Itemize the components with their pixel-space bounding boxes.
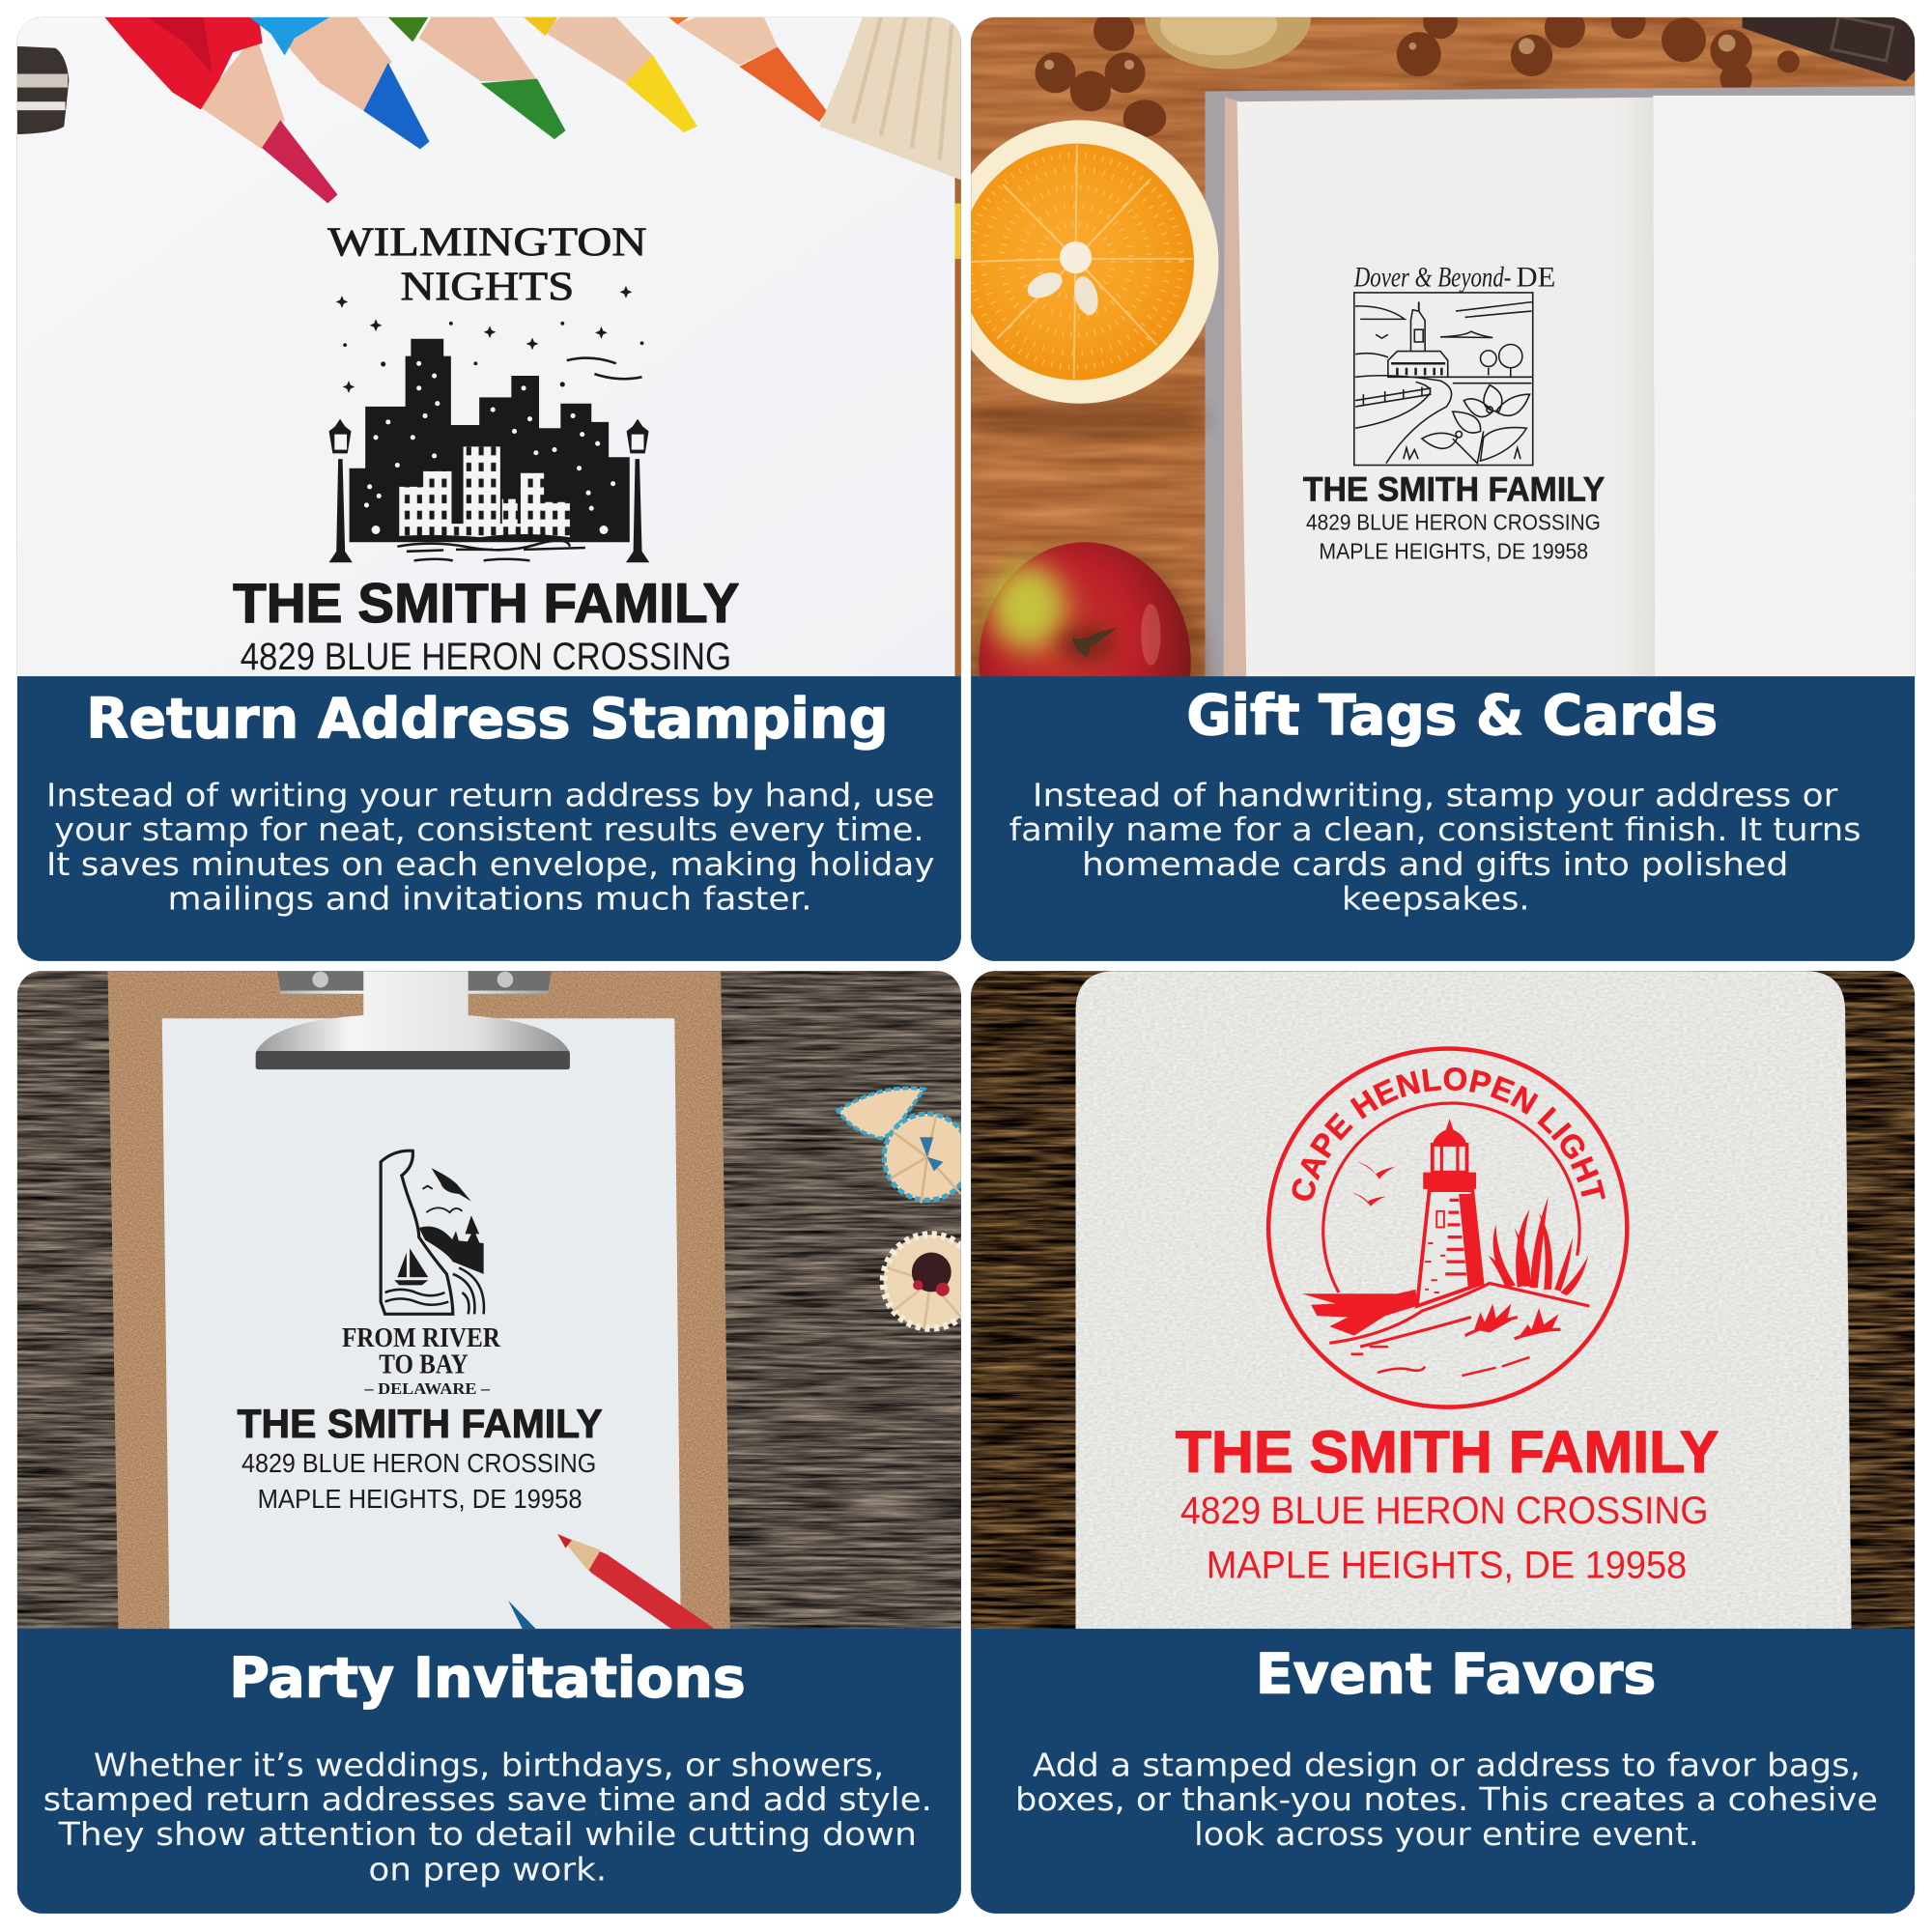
icon: Delaware scene (381, 1151, 484, 1314)
stamp: Wilmington Nights: 4829 BLUE HERON CROSSING (241, 636, 731, 678)
icon: courthouse landscape (1354, 293, 1533, 466)
icon: binder clip (17, 46, 69, 134)
icon: lighthouse badge: CAPE HENLOPEN LIGHT (1293, 1067, 1605, 1201)
photo: pencils and stamped paper (17, 17, 961, 678)
stamp: From River to Bay: 4829 BLUE HERON CROSSING (242, 1448, 596, 1478)
icon: stars and clouds (336, 286, 643, 393)
stamp: Wilmington Nights: WILMINGTON (327, 220, 647, 266)
text block (46, 778, 934, 918)
stamp: From River to Bay (238, 1151, 603, 1514)
text block: on prep work. (368, 1852, 607, 1889)
stamp: From River to Bay: FROM RIVER (342, 1323, 501, 1353)
stamp: Dover and Beyond: THE SMITH FAMILY (1303, 470, 1605, 508)
panel: gift tags and cards (941, 0, 1915, 961)
icon: dune grass (1489, 1197, 1588, 1295)
icon: lighthouse badge (1265, 1046, 1630, 1409)
icon: hazelnuts (1035, 4, 1846, 137)
panel: party invitations (17, 971, 977, 1914)
icon: orange slice (941, 120, 1218, 438)
text block (1009, 778, 1861, 918)
stamp: From River to Bay: MAPLE HEIGHTS, DE 19958 (258, 1484, 582, 1514)
stamp: Cape Henlopen Light: 4829 BLUE HERON CROSSING (1180, 1489, 1709, 1532)
icon: coloured pencils (104, 17, 961, 203)
stamp: Dover and Beyond: DE (1517, 263, 1555, 294)
heading: Event Favors (1256, 1642, 1656, 1707)
text block: Add a stamped design or address to favor bags, (1033, 1747, 1861, 1783)
text block: Whether it’s weddings, birthdays, or showers, (94, 1747, 884, 1783)
stamp: Wilmington Nights: THE SMITH FAMILY (233, 573, 739, 635)
stamp: Dover and Beyond (1303, 263, 1605, 563)
heading: Return Address Stamping (86, 686, 889, 751)
open book (1205, 86, 1915, 676)
text block: mailings and invitations much faster. (167, 881, 812, 918)
photo: coaster on dark wood (971, 971, 1915, 1629)
icon: street lamps (329, 419, 649, 562)
text block: Instead of writing your return address by hand, use (46, 778, 934, 814)
text block (1015, 1747, 1878, 1853)
coaster card (1076, 971, 1851, 1629)
icon: clipboard (108, 971, 730, 1629)
text block: homemade cards and gifts into polished (1082, 846, 1788, 883)
heading: Gift Tags & Cards (1186, 683, 1718, 748)
stamp: Dover and Beyond: 4829 BLUE HERON CROSSING (1306, 509, 1601, 534)
text block: family name for a clean, consistent finish. It turns (1009, 811, 1861, 848)
icon: pencil shavings (838, 1088, 977, 1329)
stamp: Dover and Beyond: Dover & Beyond- (1353, 263, 1511, 294)
icon: pear (1145, 17, 1312, 70)
stamp: Wilmington Nights (233, 220, 739, 678)
icon: chocolate (1743, 16, 1915, 81)
heading: Party Invitations (229, 1645, 746, 1710)
stamp: Cape Henlopen Light: MAPLE HEIGHTS, DE 19958 (1207, 1543, 1687, 1586)
stamp: From River to Bay: – DELAWARE – (364, 1379, 490, 1398)
stamp: Cape Henlopen Light: THE SMITH FAMILY (1176, 1419, 1719, 1485)
text block: Instead of handwriting, stamp your address or (1033, 778, 1838, 814)
panel: return address stamping (17, 17, 961, 961)
stamp: Cape Henlopen Light (1175, 1046, 1719, 1582)
text block: It saves minutes on each envelope, making holiday (46, 846, 934, 883)
stamp: Wilmington Nights: NIGHTS (401, 265, 574, 310)
icon: apple (971, 542, 1215, 676)
photo: clipboard on wood (17, 971, 977, 1629)
text block: look across your entire event. (1194, 1816, 1699, 1853)
stamp: Dover and Beyond: MAPLE HEIGHTS, DE 19958 (1319, 538, 1588, 563)
text block: They show attention to detail while cutting down (57, 1816, 917, 1853)
panel: event favors (971, 971, 1915, 1914)
text block (43, 1747, 932, 1889)
icon: city skyline (350, 339, 630, 560)
stamp: From River to Bay: TO BAY (379, 1350, 469, 1380)
text block: stamped return addresses save time and add style. (43, 1781, 932, 1818)
stamp: From River to Bay: THE SMITH FAMILY (238, 1401, 603, 1446)
text block: keepsakes. (1342, 881, 1530, 918)
photo: book with fruit on a table (971, 17, 1915, 676)
text block: your stamp for neat, consistent results every time. (54, 811, 924, 848)
text block: boxes, or thank-you notes. This creates a cohesive (1015, 1781, 1878, 1818)
icon: pencils (508, 1534, 715, 1629)
